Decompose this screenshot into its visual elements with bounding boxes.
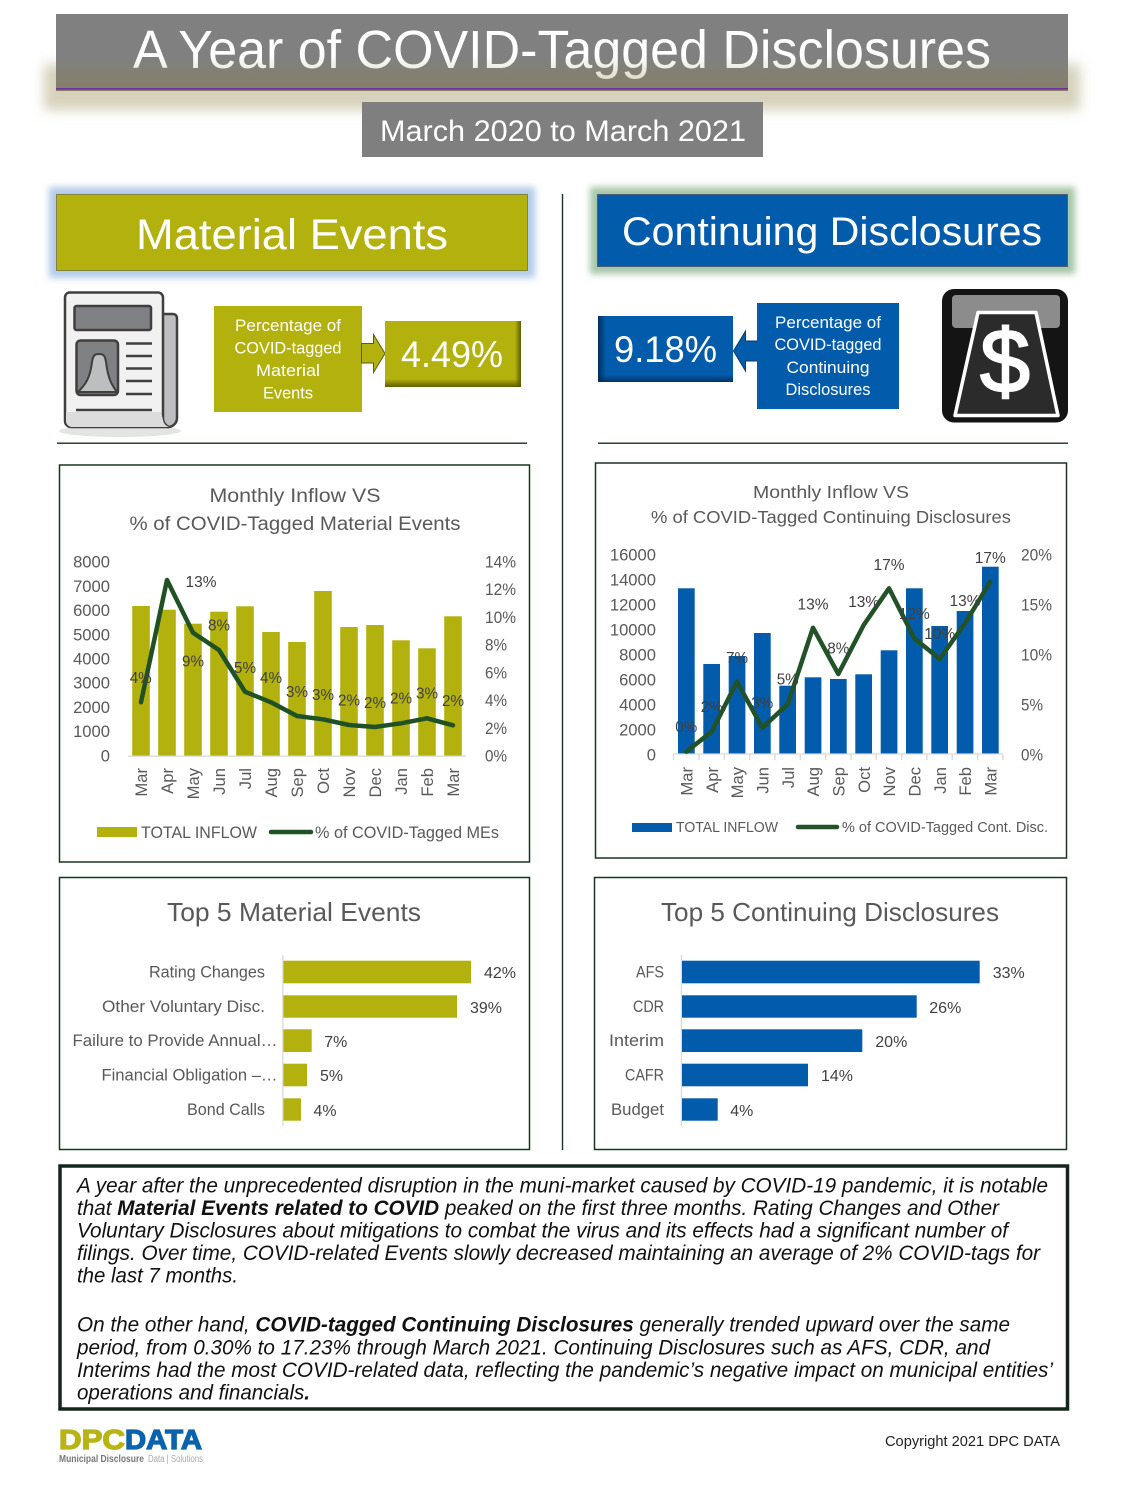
right axis labels: 0% xyxy=(1021,746,1043,764)
month labels: Oct xyxy=(314,768,333,794)
value labels xyxy=(314,965,516,1120)
month labels: Dec xyxy=(366,768,385,798)
data labels: 5% xyxy=(777,672,799,688)
month labels: Mar xyxy=(982,767,1000,796)
value labels: 20% xyxy=(875,1034,907,1051)
center divider line xyxy=(562,194,563,1150)
chart title: % of COVID-Tagged Continuing Disclosures xyxy=(651,507,1011,527)
month labels: Apr xyxy=(703,767,722,793)
month labels: Jul xyxy=(236,768,255,789)
data labels: 2% xyxy=(390,690,412,708)
month labels xyxy=(132,767,463,799)
second paragraph: Interims had the most COVID-related data, reflecting the pandemic’s negative impact on municipal entities’ xyxy=(77,1358,1054,1382)
chart title: Monthly Inflow VS xyxy=(753,482,909,502)
category labels: Budget xyxy=(611,1100,664,1119)
data labels: 12% xyxy=(899,606,930,623)
left axis labels: 2000 xyxy=(73,698,110,717)
value labels xyxy=(730,965,1025,1120)
data labels xyxy=(130,574,464,712)
month labels: Nov xyxy=(340,767,359,798)
logo: DPC DATA xyxy=(59,1424,203,1465)
logo: DPC DATA: Data | Solutions xyxy=(148,1454,203,1465)
second paragraph: period, from 0.30% to 17.23% through March 2021. Continuing Disclosures such as AFS, CDR, and xyxy=(76,1335,991,1359)
month labels: Jun xyxy=(754,767,772,794)
percent trend line xyxy=(141,580,453,727)
title banner xyxy=(44,14,1080,110)
chart title: Monthly Inflow VS xyxy=(210,486,380,507)
left axis labels: 5000 xyxy=(73,625,110,644)
data labels: 8% xyxy=(208,618,230,634)
copyright: Copyright 2021 DPC DATA xyxy=(885,1434,1060,1450)
right axis labels: 14% xyxy=(485,552,516,572)
logo: DPC DATA: Municipal Disclosure xyxy=(59,1454,144,1465)
icon: dollar deposit slot xyxy=(942,289,1068,422)
data labels: 2% xyxy=(338,692,360,710)
left axis labels: 10000 xyxy=(610,620,656,640)
month labels xyxy=(678,766,1000,798)
continuing disclosures percentage label: Continuing xyxy=(786,359,870,377)
legend: % of COVID-Tagged MEs xyxy=(315,823,499,842)
icon: dollar deposit slot: $ xyxy=(980,312,1030,412)
left axis labels: 8000 xyxy=(619,646,656,664)
value labels: 5% xyxy=(320,1068,343,1085)
right axis labels xyxy=(485,552,516,766)
left axis labels: 1000 xyxy=(73,722,110,741)
material events value 4.49%: 4.49% xyxy=(401,334,503,375)
panel: monthly inflow vs material events chart xyxy=(60,465,530,862)
value labels: 4% xyxy=(730,1103,753,1120)
category labels: Other Voluntary Disc. xyxy=(102,997,265,1016)
legend xyxy=(97,823,499,842)
right axis labels xyxy=(1021,546,1052,764)
arrow: to continuing disclosures value xyxy=(734,331,759,371)
month labels: Nov xyxy=(880,766,899,797)
data labels: 4% xyxy=(130,670,152,687)
month labels: Feb xyxy=(956,767,975,796)
section rule right xyxy=(598,442,1068,444)
chart title: Top 5 Continuing Disclosures xyxy=(661,897,999,927)
left axis labels: 0 xyxy=(647,746,656,764)
continuing disclosures percentage label: COVID-tagged xyxy=(774,336,882,354)
category labels: CAFR xyxy=(625,1066,664,1085)
data labels xyxy=(675,550,1006,736)
right axis labels: 10% xyxy=(485,608,516,627)
month labels: Aug xyxy=(262,768,281,798)
material events percentage label: Material xyxy=(256,362,320,380)
continuing disclosures value 9.18%: 9.18% xyxy=(614,329,717,370)
right axis labels: 0% xyxy=(485,746,507,766)
percent trend line xyxy=(686,582,990,752)
commentary text box xyxy=(60,1166,1068,1409)
data labels: 3% xyxy=(416,686,438,702)
chart title: Top 5 Material Events xyxy=(167,897,421,927)
category labels xyxy=(609,963,664,1119)
left axis labels xyxy=(73,552,110,766)
category labels: Interim xyxy=(609,1031,664,1050)
continuing disclosures percentage label: Disclosures xyxy=(786,381,870,399)
continuing disclosures percentage label xyxy=(757,303,899,409)
left axis labels: 7000 xyxy=(73,577,110,596)
data labels: 3% xyxy=(312,687,334,704)
right axis labels: 10% xyxy=(1021,646,1052,664)
data labels: 4% xyxy=(260,670,282,687)
panel heading: material events xyxy=(49,187,535,278)
value labels: 7% xyxy=(324,1034,347,1051)
data labels: 7% xyxy=(726,650,748,667)
value labels: 39% xyxy=(470,1000,502,1017)
category labels: Rating Changes xyxy=(149,963,265,982)
month labels: Mar xyxy=(132,768,151,797)
month labels: Mar xyxy=(444,768,463,797)
data labels: 0% xyxy=(675,719,697,736)
section rule left xyxy=(57,442,527,444)
month labels: Sep xyxy=(288,768,307,798)
chart title xyxy=(130,486,461,535)
panel heading: continuing disclosures: Continuing Disclosures xyxy=(622,210,1042,254)
second paragraph xyxy=(76,1313,1054,1404)
panel: monthly inflow vs continuing disclosures chart xyxy=(596,463,1066,858)
left axis labels: 14000 xyxy=(610,570,656,590)
continuing disclosures percentage label: Percentage of xyxy=(775,314,881,332)
category labels: Failure to Provide Annual… xyxy=(72,1031,278,1050)
data labels: 17% xyxy=(874,557,904,574)
right axis labels: 4% xyxy=(485,691,507,710)
title banner: A Year of COVID-Tagged Disclosures xyxy=(133,21,991,80)
data labels: 13% xyxy=(848,594,879,611)
month labels: Feb xyxy=(418,768,437,797)
left axis labels: 0 xyxy=(101,746,110,766)
data labels: 2% xyxy=(701,699,723,716)
data labels: 8% xyxy=(827,640,849,658)
left axis labels: 4000 xyxy=(619,696,656,714)
bars xyxy=(682,961,980,1121)
category labels: CDR xyxy=(633,997,664,1016)
category labels: Bond Calls xyxy=(187,1100,265,1119)
arrow: to material events value xyxy=(362,334,385,372)
left axis labels xyxy=(610,546,656,764)
left axis labels: 6000 xyxy=(73,601,110,620)
month labels: Aug xyxy=(804,767,823,797)
left axis labels: 4000 xyxy=(73,650,110,668)
chart title xyxy=(651,482,1011,527)
month labels: Mar xyxy=(678,767,696,796)
first paragraph xyxy=(75,1174,1048,1288)
legend: % of COVID-Tagged Cont. Disc. xyxy=(842,819,1048,836)
value labels: 14% xyxy=(821,1068,853,1085)
material events percentage label: COVID-tagged xyxy=(234,340,342,358)
material events percentage label: Percentage of xyxy=(235,317,341,335)
logo: DPC DATA: DATA xyxy=(125,1424,202,1455)
first paragraph: the last 7 months. xyxy=(77,1264,238,1288)
month labels: Oct xyxy=(855,767,874,793)
category labels: Financial Obligation –… xyxy=(102,1066,278,1085)
data labels: 3% xyxy=(751,695,773,712)
right axis labels: 20% xyxy=(1021,546,1052,564)
first paragraph: filings. Over time, COVID-related Events slowly decreased maintaining an average of 2% COVID-tags for xyxy=(77,1241,1041,1265)
panel heading: continuing disclosures xyxy=(590,187,1075,274)
value labels: 33% xyxy=(993,965,1025,982)
month labels: Jul xyxy=(779,767,798,788)
data labels: 3% xyxy=(286,684,308,701)
legend: TOTAL INFLOW xyxy=(141,823,257,842)
material events value 4.49% xyxy=(385,321,521,387)
data labels: 13% xyxy=(798,596,828,614)
data labels: 17% xyxy=(975,550,1006,567)
month labels: May xyxy=(728,766,747,798)
logo: DPC DATA: DPC xyxy=(59,1424,125,1455)
legend xyxy=(632,819,1048,836)
first paragraph: A year after the unprecedented disruption in the muni-market caused by COVID-19 pandemic, it is notable xyxy=(75,1174,1048,1198)
left axis labels: 2000 xyxy=(619,720,656,740)
data labels: 13% xyxy=(950,593,980,610)
month labels: Sep xyxy=(830,767,848,797)
date range subtitle xyxy=(362,102,763,157)
left axis labels: 3000 xyxy=(73,674,110,693)
chart title: % of COVID-Tagged Material Events xyxy=(130,514,461,535)
right axis labels: 2% xyxy=(485,719,507,738)
left axis labels: 6000 xyxy=(619,670,656,690)
continuing disclosures value 9.18% xyxy=(598,316,733,382)
first paragraph: Voluntary Disclosures about mitigations to combat the virus and its effects had a significant number of xyxy=(77,1219,1010,1243)
panel: top 5 continuing disclosures xyxy=(594,878,1066,1150)
left axis labels: 8000 xyxy=(73,552,110,572)
data labels: 2% xyxy=(364,695,386,712)
month labels: Apr xyxy=(158,768,177,794)
second paragraph: On the other hand, COVID-tagged Continuing Disclosures generally trended upward over the same xyxy=(77,1313,1010,1337)
category labels: AFS xyxy=(636,963,664,982)
inflow bars xyxy=(132,591,462,756)
left axis labels: 12000 xyxy=(610,596,656,614)
value labels: 26% xyxy=(929,1000,961,1017)
second paragraph: operations and financials. xyxy=(77,1380,310,1404)
month labels: May xyxy=(184,767,203,799)
data labels: 5% xyxy=(234,660,256,677)
panel: top 5 material events xyxy=(60,878,530,1150)
right axis labels: 8% xyxy=(485,636,507,655)
right axis labels: 12% xyxy=(485,580,516,599)
month labels: Dec xyxy=(906,767,924,797)
bars xyxy=(284,961,471,1121)
first paragraph: that Material Events related to COVID peaked on the first three months. Rating Changes and Other xyxy=(77,1196,1000,1220)
right axis labels: 5% xyxy=(1021,696,1043,714)
value labels: 42% xyxy=(484,965,516,982)
data labels: 2% xyxy=(442,693,464,710)
left axis labels: 16000 xyxy=(610,546,656,564)
month labels: Jan xyxy=(392,768,411,795)
category labels xyxy=(72,963,278,1119)
data labels: 9% xyxy=(182,654,204,670)
panel heading: material events: Material Events xyxy=(136,211,448,259)
inflow bars xyxy=(678,567,999,754)
icon: newspaper xyxy=(59,292,181,437)
material events percentage label xyxy=(214,306,362,412)
legend: TOTAL INFLOW xyxy=(676,819,779,836)
date range subtitle: March 2020 to March 2021 xyxy=(380,115,746,148)
data labels: 10% xyxy=(924,626,955,643)
value labels: 4% xyxy=(314,1103,336,1120)
right axis labels: 15% xyxy=(1021,596,1052,614)
month labels: Jan xyxy=(931,767,950,794)
month labels: Jun xyxy=(210,768,229,795)
right axis labels: 6% xyxy=(485,663,507,682)
material events percentage label: Events xyxy=(263,384,313,402)
data labels: 13% xyxy=(186,574,216,591)
